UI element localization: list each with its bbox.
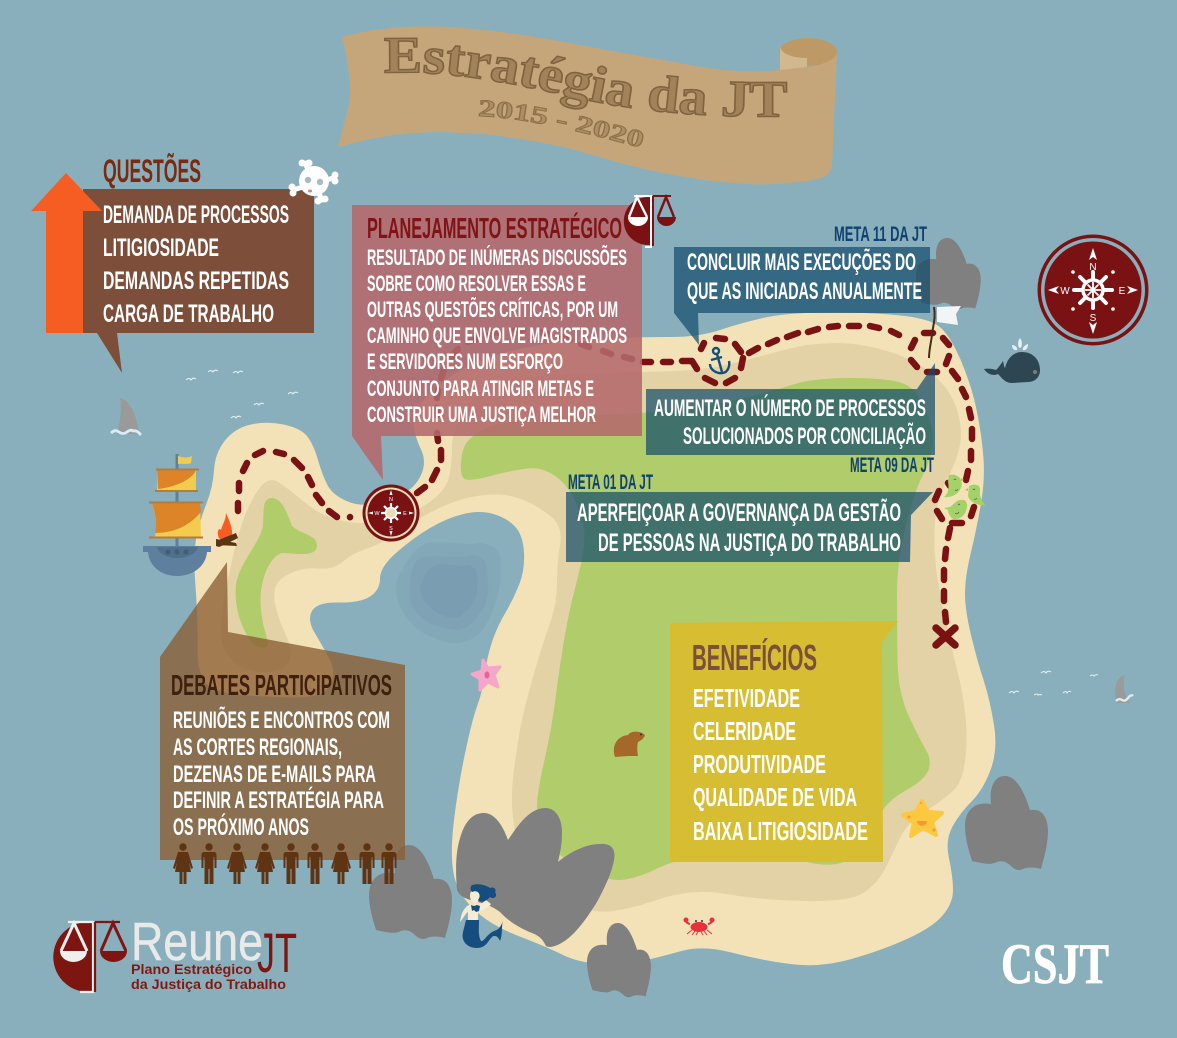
- beneficios list: PRODUTIVIDADE: [693, 749, 826, 779]
- planejamento body text: OUTRAS QUESTÕES CRÍTICAS, POR UM: [367, 297, 618, 322]
- callout: meta 11: [674, 247, 930, 345]
- callout: meta 01: APERFEIÇOAR A GOVERNANÇA DA GESTÃO: [577, 497, 901, 527]
- icon: mermaid: [460, 884, 503, 948]
- small compass: N: [389, 497, 393, 503]
- deep water in bay: [396, 542, 501, 643]
- panel: beneficios: [670, 621, 898, 862]
- large rock: [456, 808, 614, 947]
- planejamento heading: PLANEJAMENTO ESTRATÉGICO: [367, 211, 622, 245]
- questoes heading: QUESTÕES: [103, 153, 201, 189]
- questoes list: [103, 201, 289, 328]
- planejamento body text: SOBRE COMO RESOLVER ESSAS E: [367, 271, 586, 296]
- icon: crab: [684, 918, 714, 935]
- icon: whale: [984, 338, 1040, 383]
- island inner band: [221, 343, 967, 912]
- small compass: [362, 484, 420, 542]
- large compass rose: S: [1090, 313, 1097, 324]
- large compass rose: W: [1060, 286, 1070, 297]
- callout: meta 01: [566, 492, 933, 562]
- beneficios list: EFETIVIDADE: [693, 683, 800, 713]
- icon: parrots: [944, 475, 985, 519]
- panel: questoes: [31, 153, 314, 373]
- planejamento body text: RESULTADO DE INÚMERAS DISCUSSÕES: [367, 245, 627, 270]
- planejamento body text: CAMINHO QUE ENVOLVE MAGISTRADOS: [367, 323, 627, 348]
- large compass rose: E: [1119, 286, 1126, 297]
- questoes list: CARGA DE TRABALHO: [103, 300, 274, 328]
- logo: reunejt: [53, 912, 297, 992]
- peninsula green: [236, 498, 317, 648]
- logo subtitle: Plano Estratégico: [131, 962, 252, 977]
- planejamento box: [352, 205, 642, 480]
- seagulls: [186, 370, 1098, 695]
- questoes list: DEMANDAS REPETIDAS: [103, 267, 289, 295]
- title text: Estratégia da JT: [384, 38, 788, 118]
- planejamento body text: CONJUNTO PARA ATINGIR METAS E: [367, 376, 594, 401]
- logo subtitle: da Justiça do Trabalho: [131, 977, 286, 992]
- panel: planejamento estrategico: [352, 205, 642, 480]
- small compass: E: [403, 511, 407, 517]
- beneficios list: BAIXA LITIGIOSIDADE: [693, 816, 868, 846]
- questoes list: DEMANDA DE PROCESSOS: [103, 201, 289, 229]
- icon: pink starfish: [472, 660, 500, 690]
- rock top right: [916, 238, 981, 309]
- rock right: [965, 776, 1048, 870]
- rock bottom: [587, 923, 651, 997]
- icon: yellow starfish: [903, 801, 942, 836]
- logo wordmark: Reune: [131, 912, 263, 972]
- debates body text: OS PRÓXIMO ANOS: [173, 813, 309, 841]
- planejamento body text: CONSTRUIR UMA JUSTIÇA MELHOR: [367, 402, 596, 427]
- callout: meta 09: [646, 363, 935, 455]
- logo subtitle: [131, 962, 286, 992]
- parrot 3: [944, 500, 967, 519]
- debates body text: REUNIÕES E ENCONTROS COM: [173, 706, 390, 734]
- large compass rose: N: [1089, 262, 1097, 273]
- island map: [194, 312, 995, 965]
- debates heading: DEBATES PARTICIPATIVOS: [171, 670, 392, 702]
- small compass: W: [374, 511, 380, 517]
- callout: meta 09: SOLUCIONADOS POR CONCILIAÇÃO: [683, 422, 926, 450]
- meta 09 label: META 09 DA JT: [850, 453, 934, 477]
- island green interior: [461, 378, 933, 880]
- debates body text: DEFINIR A ESTRATÉGIA PARA: [173, 786, 384, 814]
- rock lower left: [369, 845, 452, 939]
- beneficios list: [693, 683, 868, 846]
- logo: csjt: CSJT: [1001, 933, 1109, 996]
- parrot 2: [965, 485, 985, 505]
- dashed treasure route: [238, 326, 974, 622]
- questoes box: [83, 189, 314, 373]
- icon: rising arrow: [31, 173, 102, 333]
- debates body text: AS CORTES REGIONAIS,: [173, 734, 342, 761]
- debates body text: DEZENAS DE E-MAILS PARA: [173, 761, 376, 788]
- callout: meta 01: DE PESSOAS NA JUSTIÇA DO TRABALHO: [598, 529, 901, 557]
- meta 11 label: META 11 DA JT: [834, 222, 927, 246]
- planejamento body text: E SERVIDORES NUM ESFORÇO: [367, 349, 563, 374]
- beneficios heading: BENEFÍCIOS: [692, 637, 817, 678]
- small compass: S: [389, 526, 393, 532]
- treasure X mark: [936, 628, 955, 645]
- title years: 2015 - 2020: [478, 100, 644, 147]
- callout: meta 09: AUMENTAR O NÚMERO DE PROCESSOS: [654, 394, 926, 422]
- callout: meta 11: QUE AS INICIADAS ANUALMENTE: [687, 278, 922, 305]
- icon: flag: [929, 306, 961, 358]
- island sand: [194, 312, 995, 965]
- icon: row of people: [173, 843, 396, 884]
- beneficios list: CELERIDADE: [693, 716, 796, 746]
- icon: anchor: [710, 348, 729, 373]
- parrot 1: [944, 475, 964, 497]
- questoes list: LITIGIOSIDADE: [103, 234, 219, 262]
- logo jt: JT: [257, 921, 297, 984]
- icon: scales of justice: [624, 196, 676, 247]
- icon: shark fin right: [1115, 675, 1133, 703]
- icon: ship: [143, 454, 211, 576]
- logo scales: [53, 922, 127, 992]
- icon: skull and crossbones: [288, 160, 338, 204]
- anchor marker: [710, 348, 729, 373]
- large compass rose: [1038, 234, 1148, 346]
- meta 01 label: META 01 DA JT: [568, 470, 653, 494]
- callout: meta 11: CONCLUIR MAIS EXECUÇÕES DO: [687, 248, 916, 276]
- planejamento body text: [367, 245, 627, 427]
- icon: capybara: [614, 732, 645, 757]
- icon: campfire: [216, 513, 238, 547]
- panel: debates participativos: [160, 562, 405, 860]
- icon: shark fin left: [111, 398, 141, 435]
- title banner: [338, 26, 837, 184]
- debates body text: [173, 706, 390, 841]
- beneficios list: QUALIDADE DE VIDA: [693, 782, 857, 812]
